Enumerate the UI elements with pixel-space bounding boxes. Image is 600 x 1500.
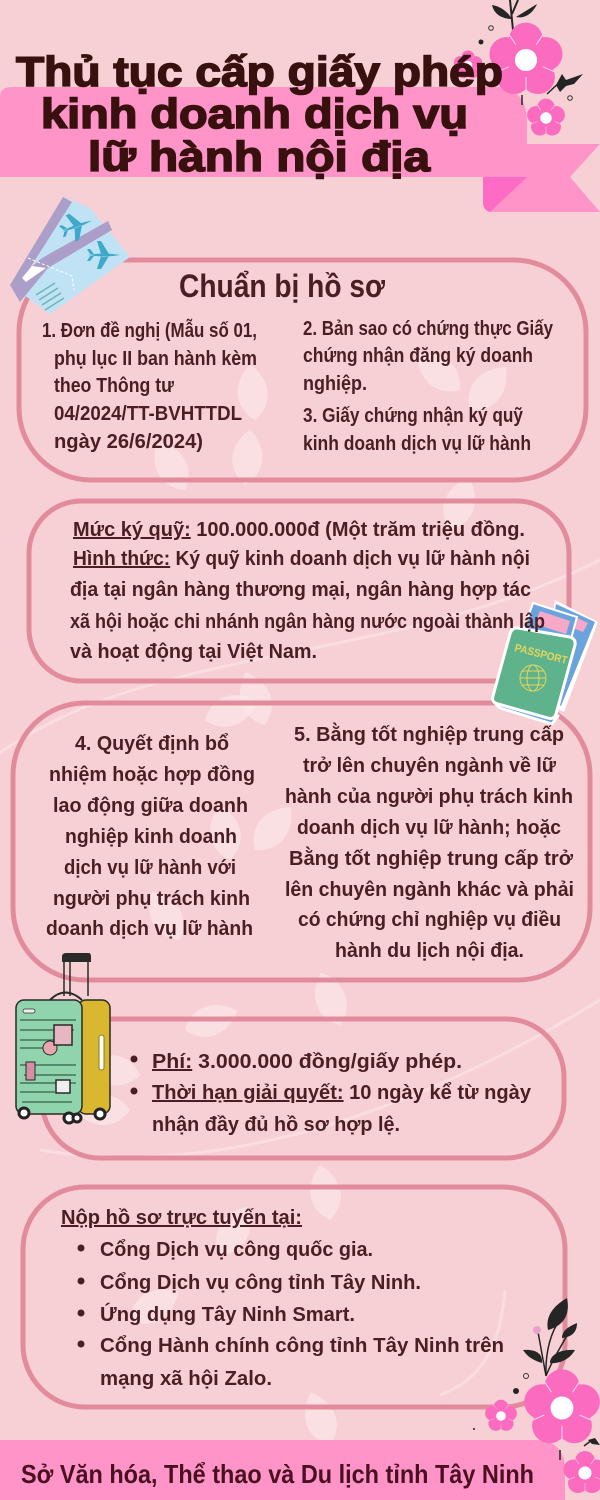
list: Cổng Dịch vụ công quốc gia.	[100, 1239, 373, 1261]
right column: kinh doanh dịch vụ lữ hành	[303, 433, 531, 455]
left column: 04/2024/TT-BVHTTDL	[54, 403, 242, 425]
panel: phí và thời hạn	[42, 1019, 564, 1158]
fee text	[152, 1051, 532, 1136]
right column	[303, 318, 554, 455]
list: mạng xã hội Zalo.	[100, 1368, 272, 1390]
bullets	[78, 1244, 84, 1348]
left column: 1. Đơn đề nghị (Mẫu số 01,	[42, 318, 257, 342]
text block: xã hội hoặc chi nhánh ngân hàng nước ngoài thành lập	[70, 611, 545, 633]
item 4: nghiệp kinh doanh	[65, 826, 237, 848]
bullets	[130, 1056, 138, 1094]
item 5	[285, 722, 574, 962]
fee text: Phí: 3.000.000 đồng/giấy phép.	[152, 1051, 462, 1073]
text block	[70, 519, 545, 663]
ribbon banner	[0, 87, 600, 212]
item 4	[46, 733, 255, 940]
item 5: doanh dịch vụ lữ hành; hoặc	[297, 817, 561, 839]
flowers top right	[454, 0, 583, 136]
icon: suitcase	[16, 953, 110, 1123]
left column: phụ lục II ban hành kèm	[54, 348, 257, 370]
item 5: hành du lịch nội địa.	[335, 940, 524, 962]
list: Ứng dụng Tây Ninh Smart.	[100, 1302, 355, 1326]
icon: passport: PASSPORT	[513, 642, 569, 667]
item 5: hành của người phụ trách kinh	[285, 786, 573, 808]
list: Cổng Hành chính công tỉnh Tây Ninh trên	[100, 1335, 504, 1357]
item 4: người phụ trách kinh	[53, 888, 250, 910]
text block: Hình thức: Ký quỹ kinh doanh dịch vụ lữ hành nội	[73, 548, 530, 570]
fee text: Thời hạn giải quyết: 10 ngày kể từ ngày	[152, 1082, 532, 1104]
right column: chứng nhận đăng ký doanh	[303, 345, 533, 367]
panel: mức ký quỹ	[29, 501, 598, 724]
icon: plane tickets	[10, 197, 130, 314]
item 5: Bằng tốt nghiệp trung cấp trở	[289, 846, 574, 870]
footer bar	[0, 1440, 565, 1500]
right column: 2. Bản sao có chứng thực Giấy	[303, 318, 554, 340]
panel: nộp hồ sơ trực tuyến	[23, 1187, 565, 1407]
heading: Chuẩn bị hồ sơ	[179, 268, 385, 304]
item 4: lao động giữa doanh	[53, 795, 248, 817]
item 4: 4. Quyết định bổ	[75, 733, 229, 755]
background leaves and swirl	[0, 343, 600, 1450]
title	[16, 48, 503, 180]
list	[100, 1239, 504, 1390]
title: Thủ tục cấp giấy phép	[16, 48, 503, 95]
text block: địa tại ngân hàng thương mại, ngân hàng hợp tác	[70, 579, 531, 601]
item 5: có chứng chỉ nghiệp vụ điều	[298, 909, 561, 931]
left column: ngày 26/6/2024)	[54, 431, 203, 453]
panel: hồ sơ 4 và 5	[13, 703, 590, 980]
item 5: trở lên chuyên ngành về lữ	[303, 755, 557, 777]
list: Cổng Dịch vụ công tỉnh Tây Ninh.	[100, 1272, 421, 1294]
panel: chuẩn bị hồ sơ	[10, 197, 586, 480]
footer text: Sở Văn hóa, Thể thao và Du lịch tỉnh Tây Ninh	[21, 1459, 534, 1489]
icon: passport	[493, 600, 598, 724]
flowers bottom right	[473, 1298, 600, 1493]
left column: theo Thông tư	[54, 375, 174, 397]
item 5: lên chuyên ngành khác và phải	[285, 879, 574, 901]
item 5: 5. Bằng tốt nghiệp trung cấp	[294, 722, 564, 746]
text block: Mức ký quỹ: 100.000.000đ (Một trăm triệu đồng.	[73, 519, 525, 541]
right column: 3. Giấy chứng nhận ký quỹ	[303, 405, 524, 427]
subheading: Nộp hồ sơ trực tuyến tại:	[61, 1207, 302, 1229]
item 4: nhiệm hoặc hợp đồng	[49, 764, 255, 786]
fee text: nhận đầy đủ hồ sơ hợp lệ.	[152, 1114, 400, 1136]
right column: nghiệp.	[303, 373, 367, 395]
left column	[42, 318, 257, 453]
text block: và hoạt động tại Việt Nam.	[70, 641, 317, 663]
item 4: doanh dịch vụ lữ hành	[46, 918, 253, 940]
title: kinh doanh dịch vụ	[41, 90, 468, 137]
title: lữ hành nội địa	[88, 133, 431, 180]
item 4: dịch vụ lữ hành với	[64, 857, 236, 879]
